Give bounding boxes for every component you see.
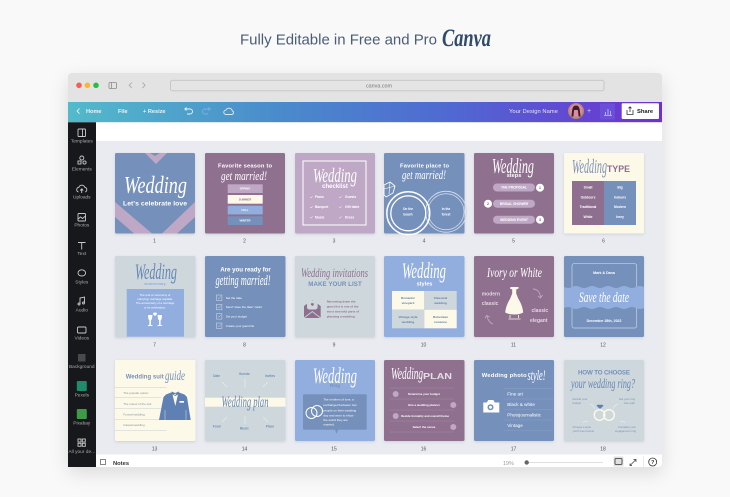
- canva toolbar: + Resize: [143, 109, 166, 115]
- card 11: ivory or white: Ivory or White: [486, 266, 542, 281]
- card 15: wedding ring: Ring: [330, 383, 340, 388]
- card 16: wedding plan list: Hire a wedding planner: [408, 403, 441, 407]
- page numbers: 17: [511, 447, 516, 453]
- card 14: wedding plan: Invites: [265, 374, 275, 378]
- card 3: wedding checklist: Wedding: [313, 165, 357, 187]
- page numbers: 2: [243, 239, 246, 245]
- card 6: wedding type: Small: [584, 186, 592, 190]
- card 1: wedding cover: Wedding: [124, 173, 187, 199]
- card 6: wedding type: [564, 153, 644, 234]
- card 18: how to choose ring: HOW TO CHOOSE: [578, 370, 630, 377]
- card 10: wedding styles: Vintage style: [398, 315, 418, 319]
- card 9: wedding invitations: Narrowing down the: [327, 300, 356, 304]
- card 5: wedding steps: Wedding: [492, 154, 534, 178]
- page numbers: 1: [153, 239, 156, 245]
- sidebar: Audio: [76, 308, 88, 314]
- card 15: wedding ring: married.: [323, 423, 335, 427]
- card 14: wedding plan: [205, 360, 286, 441]
- card 8: are you ready: Are you ready for: [220, 266, 271, 273]
- card 12: save the date: Save the date: [579, 290, 629, 306]
- card 7: wedding anniversary: [115, 256, 196, 337]
- card 17: wedding photo style: [474, 360, 554, 441]
- page numbers: 6: [602, 239, 605, 245]
- card 12: save the date: December 28th, 2022: [587, 319, 621, 323]
- card 1: wedding cover: Let's celebrate love: [123, 200, 187, 208]
- card 9: wedding invitations: most stressful parts of: [327, 310, 359, 314]
- card 6: wedding type: Wedding: [572, 156, 607, 178]
- sidebar: Pixabay: [73, 420, 91, 426]
- card 17: wedding photo style: Black & white: [507, 402, 535, 407]
- canva toolbar: [68, 102, 662, 122]
- share button: [622, 103, 659, 119]
- browser window: [68, 73, 662, 467]
- card 8: are you ready: getting married!: [216, 273, 270, 289]
- card 14: wedding plan: Date: [213, 374, 220, 378]
- notes bar: ?: [651, 460, 654, 466]
- card 3: wedding checklist: Dress: [345, 215, 354, 219]
- canva toolbar: Your Design Name: [509, 109, 558, 115]
- card 3: wedding checklist: Plans: [315, 195, 324, 199]
- card 12: save the date: Mark & Dana: [593, 271, 616, 275]
- card 5: wedding steps: 2: [487, 201, 490, 206]
- sidebar: All your de...: [68, 449, 95, 455]
- card 6: wedding type: Outdoors: [581, 196, 596, 200]
- card 3: wedding checklist: Banquet: [315, 205, 329, 209]
- card 2: favorite season: Favorite season to: [218, 164, 272, 170]
- card 13: wedding suit guide: [115, 360, 196, 441]
- title: Canva: [442, 25, 491, 52]
- card 5: wedding steps: THE PROPOSAL: [501, 186, 527, 190]
- card 18: how to choose ring: budget: [572, 401, 581, 405]
- card 13: wedding suit guide: Casual wedding: [123, 423, 145, 427]
- card 15: wedding ring: people on their wedding: [323, 408, 356, 412]
- card 8: are you ready: [205, 256, 286, 337]
- card 7: wedding anniversary: marrying; marriage nuptials.: [137, 297, 173, 301]
- sidebar: Videos: [75, 336, 90, 342]
- card 16: wedding plan list: Wedding: [391, 364, 423, 383]
- card 17: wedding photo style: style!: [528, 368, 546, 384]
- card 17: wedding photo style: Wedding photo: [482, 373, 527, 379]
- card 14: wedding plan: Music: [240, 427, 249, 431]
- card 7: wedding anniversary: or its celebration.: [144, 306, 166, 310]
- card 10: wedding styles: wedding: [433, 301, 447, 305]
- card 2: favorite season: WINTER: [239, 219, 251, 223]
- card 3: wedding checklist: Gift table: [345, 205, 359, 209]
- card 11: ivory or white: classic: [532, 308, 548, 314]
- card 5: wedding steps: [474, 153, 554, 234]
- page numbers: 14: [242, 447, 247, 453]
- card 5: wedding steps: 1: [539, 185, 542, 190]
- browser chrome bar: [68, 73, 662, 102]
- card 9: wedding invitations: [295, 256, 375, 337]
- card 4: favorite place: forest: [442, 212, 451, 216]
- card 17: wedding photo style: Vintage: [507, 423, 523, 428]
- card 15: wedding ring: Wedding: [313, 363, 357, 388]
- card 7: wedding anniversary: Wedding: [135, 259, 177, 284]
- card 10: wedding styles: Wedding: [402, 258, 446, 283]
- card 16: wedding plan list: [384, 360, 464, 441]
- card 10: wedding styles: wedding: [401, 320, 414, 324]
- card 18: how to choose ring: size right: [624, 401, 635, 405]
- card 14: wedding plan: Food: [213, 425, 221, 429]
- card 13: wedding suit guide: Formal wedding: [123, 412, 145, 416]
- card 4: favorite place: Favorite place to: [400, 164, 449, 170]
- card 9: wedding invitations: planning a wedding.: [327, 315, 356, 319]
- card 9: wedding invitations: MAKE YOUR LIST: [308, 281, 362, 288]
- card 15: wedding ring: The emblem of love, a: [323, 397, 354, 401]
- card 18: how to choose ring: Get your ring: [619, 397, 635, 401]
- card 5: wedding steps: WEDDING EVENT: [500, 218, 528, 222]
- card 10: wedding styles: Classical: [434, 296, 447, 300]
- sidebar: Text: [77, 251, 87, 257]
- card 6: wedding type: Traditional: [580, 205, 596, 209]
- sidebar: Styles: [75, 280, 89, 286]
- card 6: wedding type: Ivory: [616, 215, 624, 219]
- card 16: wedding plan list: Determine your budget: [408, 392, 440, 396]
- card 2: favorite season: [205, 153, 285, 234]
- card 17: wedding photo style: Fine art: [507, 392, 524, 396]
- white ruler strip: [96, 122, 662, 141]
- card 13: wedding suit guide: guide: [165, 369, 185, 384]
- card 13: wedding suit guide: The popular option: [123, 391, 149, 395]
- card 4: favorite place: On the: [403, 207, 413, 211]
- canva toolbar: Home: [86, 109, 102, 115]
- page numbers: 16: [421, 447, 426, 453]
- page numbers: 5: [512, 239, 515, 245]
- card 3: wedding checklist: [295, 153, 375, 234]
- card 18: how to choose ring: you'll love forever: [572, 429, 594, 433]
- canva toolbar: File: [118, 109, 128, 115]
- card 7: wedding anniversary: The end or ceremony of: [140, 293, 171, 297]
- card 3: wedding checklist: Guests: [345, 195, 356, 199]
- sidebar: Uploads: [73, 194, 91, 200]
- card 6: wedding type: Modern: [614, 205, 626, 209]
- card 8: are you ready: Send "save the date" cards: [226, 305, 262, 309]
- sidebar: Elements: [72, 166, 92, 172]
- card 10: wedding styles: Bohemian: [433, 315, 448, 319]
- card 1: wedding cover: [115, 153, 195, 234]
- share button: Share: [637, 109, 654, 115]
- card 4: favorite place: get married!: [402, 167, 446, 182]
- card 10: wedding styles: Romantic: [401, 296, 415, 300]
- sidebar: Templates: [71, 138, 93, 144]
- card 2: favorite season: get married!: [221, 168, 267, 183]
- card 15: wedding ring: [295, 360, 375, 441]
- card 3: wedding checklist: checklist: [322, 184, 348, 190]
- card 14: wedding plan: Wedding plan: [222, 394, 269, 411]
- card 6: wedding type: White: [584, 215, 593, 219]
- sidebar: Pexels: [75, 392, 90, 398]
- browser chrome bar: canva.com: [366, 84, 393, 90]
- page numbers: 9: [333, 343, 336, 349]
- card 9: wedding invitations: guest list is one of the: [327, 305, 359, 309]
- card 8: are you ready: Set the date: [226, 296, 242, 300]
- card 8: are you ready: Set your budget: [226, 314, 247, 318]
- card 3: wedding checklist: Music: [315, 215, 325, 219]
- page numbers: 7: [153, 343, 156, 349]
- card 2: favorite season: SPRING: [240, 187, 250, 191]
- card 6: wedding type: Big: [617, 186, 623, 190]
- card 16: wedding plan list: Select the venue: [413, 425, 436, 429]
- sidebar: Photos: [74, 222, 90, 228]
- card 15: wedding ring: the world they are: [323, 418, 348, 422]
- card 14: wedding plan: Place: [266, 425, 274, 429]
- page numbers: 12: [600, 343, 606, 349]
- card 18: how to choose ring: [564, 360, 644, 441]
- card 7: wedding anniversary: anniversary: [144, 282, 167, 286]
- card 11: ivory or white: [474, 256, 554, 337]
- card 18: how to choose ring: your wedding ring?: [570, 376, 635, 391]
- page numbers: 18: [600, 447, 606, 453]
- card 6: wedding type: TYPE: [607, 164, 630, 174]
- sidebar: Background: [69, 364, 95, 370]
- page numbers: 15: [331, 447, 337, 453]
- card 18: how to choose ring: Complete your: [618, 425, 636, 429]
- canva toolbar: +: [587, 108, 591, 115]
- page numbers: 4: [423, 239, 426, 245]
- card 13: wedding suit guide: The colour of the suit: [123, 402, 151, 406]
- card 4: favorite place: beach: [403, 212, 413, 216]
- card 8: are you ready: Create your guest list: [226, 324, 254, 328]
- page numbers: 8: [243, 343, 246, 349]
- card 4: favorite place: [384, 153, 466, 235]
- card 17: wedding photo style: Photojournalistic: [507, 412, 542, 418]
- sidebar: [68, 122, 96, 467]
- card 4: favorite place: In the: [442, 207, 450, 211]
- title: Fully Editable in Free and Pro: [240, 32, 437, 48]
- card 10: wedding styles: vineyard: [402, 301, 414, 305]
- card 18: how to choose ring: Choose a style: [572, 425, 591, 429]
- card 7: wedding anniversary: The anniversary of a marriage: [136, 301, 175, 305]
- card 18: how to choose ring: Decide your: [572, 397, 587, 401]
- page numbers: 13: [152, 447, 157, 453]
- card 11: ivory or white: modern: [482, 292, 500, 298]
- card 11: ivory or white: elegant: [530, 318, 548, 324]
- page numbers: 10: [421, 343, 426, 349]
- icon: tuxedo jacket: [159, 392, 191, 420]
- card 5: wedding steps: BRIDAL SHOWER: [500, 202, 529, 206]
- card 10: wedding styles: romance: [434, 320, 447, 324]
- card 15: wedding ring: exchanged between two: [323, 403, 357, 407]
- card 2: favorite season: FALL: [242, 208, 249, 212]
- card 10: wedding styles: [384, 256, 464, 337]
- notes bar: Notes: [113, 461, 129, 467]
- card 16: wedding plan list: Decide formality and overall theme: [401, 414, 449, 418]
- title: [240, 25, 491, 52]
- notes bar: [96, 454, 662, 467]
- page numbers: 11: [511, 343, 516, 349]
- page numbers: [152, 239, 606, 453]
- card 6: wedding type: Indoors: [614, 196, 626, 200]
- card 15: wedding ring: day and worn to show: [323, 413, 354, 417]
- card 2: favorite season: SUMMER: [239, 197, 251, 201]
- card 13: wedding suit guide: Wedding suit: [126, 374, 164, 380]
- card 5: wedding steps: steps: [507, 173, 521, 179]
- card 16: wedding plan list: PLAN: [423, 371, 452, 381]
- page numbers: 3: [333, 239, 336, 245]
- card 5: wedding steps: 3: [539, 217, 542, 222]
- notes bar: 19%: [503, 461, 514, 467]
- card 10: wedding styles: styles: [417, 282, 432, 288]
- card 14: wedding plan: Guests: [239, 372, 250, 376]
- card 18: how to choose ring: engagement ring: [615, 429, 636, 433]
- card 9: wedding invitations: Wedding invitations: [301, 266, 368, 280]
- card 11: ivory or white: classic: [482, 301, 499, 307]
- card 12: save the date: [564, 256, 644, 337]
